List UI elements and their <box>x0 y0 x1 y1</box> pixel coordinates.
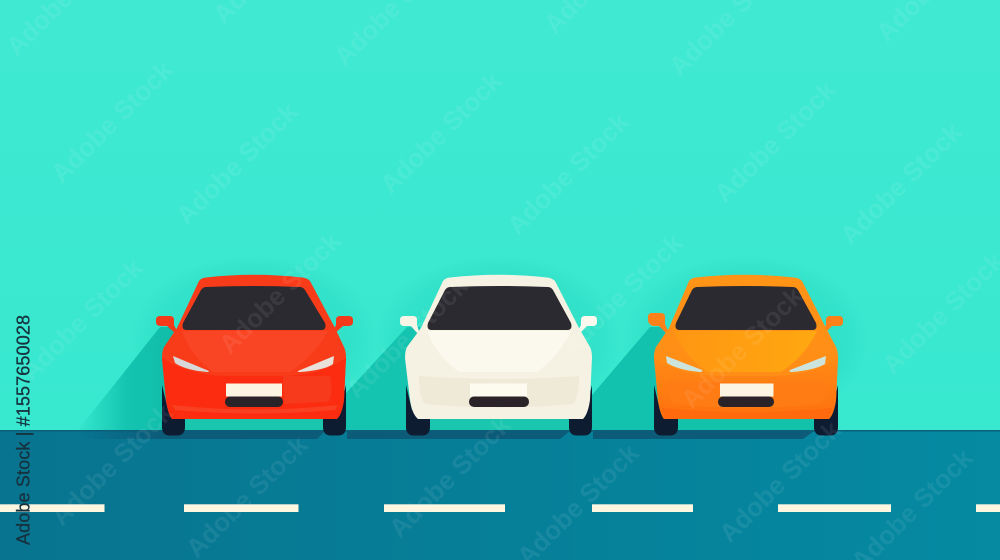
wheels <box>162 385 346 436</box>
hood <box>427 331 571 372</box>
body <box>405 275 592 419</box>
watermarks: Adobe Stock <box>45 397 179 531</box>
watermarks: Adobe Stock <box>170 96 304 230</box>
stock id label: Adobe Stock | #1557650028 <box>14 315 34 545</box>
watermarks: Adobe Stock <box>213 225 347 359</box>
watermarks: Adobe Stock <box>340 270 474 404</box>
number plate and grille <box>720 384 774 396</box>
hood <box>674 331 817 372</box>
road <box>0 430 1000 560</box>
car: orange <box>648 275 843 436</box>
hood <box>182 331 328 372</box>
body <box>654 275 838 419</box>
windshield <box>428 286 572 330</box>
lower bumper <box>654 358 838 419</box>
watermarks: Adobe Stock <box>15 252 149 386</box>
watermarks: Adobe Stock <box>834 116 968 250</box>
background wall <box>0 0 1000 431</box>
headlights <box>173 356 209 372</box>
bumper highlight <box>283 376 332 404</box>
number plate and grille <box>470 384 527 396</box>
car: white <box>400 275 597 436</box>
windshield <box>182 286 326 330</box>
watermarks: Adobe Stock <box>675 280 809 414</box>
lower bumper <box>162 358 346 419</box>
watermarks: Adobe Stock <box>383 409 517 543</box>
lane markings <box>0 504 1000 512</box>
wheels <box>406 385 592 436</box>
watermarks: Adobe Stock <box>713 414 847 548</box>
headlights <box>666 356 702 372</box>
watermarks: Adobe Stock <box>708 74 842 208</box>
watermarks: Adobe Stock <box>374 65 508 199</box>
car shadows on wall <box>78 327 834 430</box>
soft glow behind cars <box>129 255 871 425</box>
body <box>162 275 346 419</box>
lower bumper recess <box>419 376 579 408</box>
road shadow strips <box>77 430 814 439</box>
windshield <box>676 286 816 330</box>
mirrors <box>648 313 668 333</box>
watermarks: Adobe Stock <box>501 106 635 240</box>
watermarks: Adobe Stock <box>555 227 689 361</box>
number plate and grille <box>226 384 282 396</box>
wheels <box>654 385 838 436</box>
car: red <box>156 275 353 436</box>
watermarks: Adobe Stock <box>45 54 179 188</box>
watermarks: Adobe Stock <box>180 429 314 560</box>
mirrors <box>400 316 419 333</box>
mirrors <box>156 316 177 333</box>
